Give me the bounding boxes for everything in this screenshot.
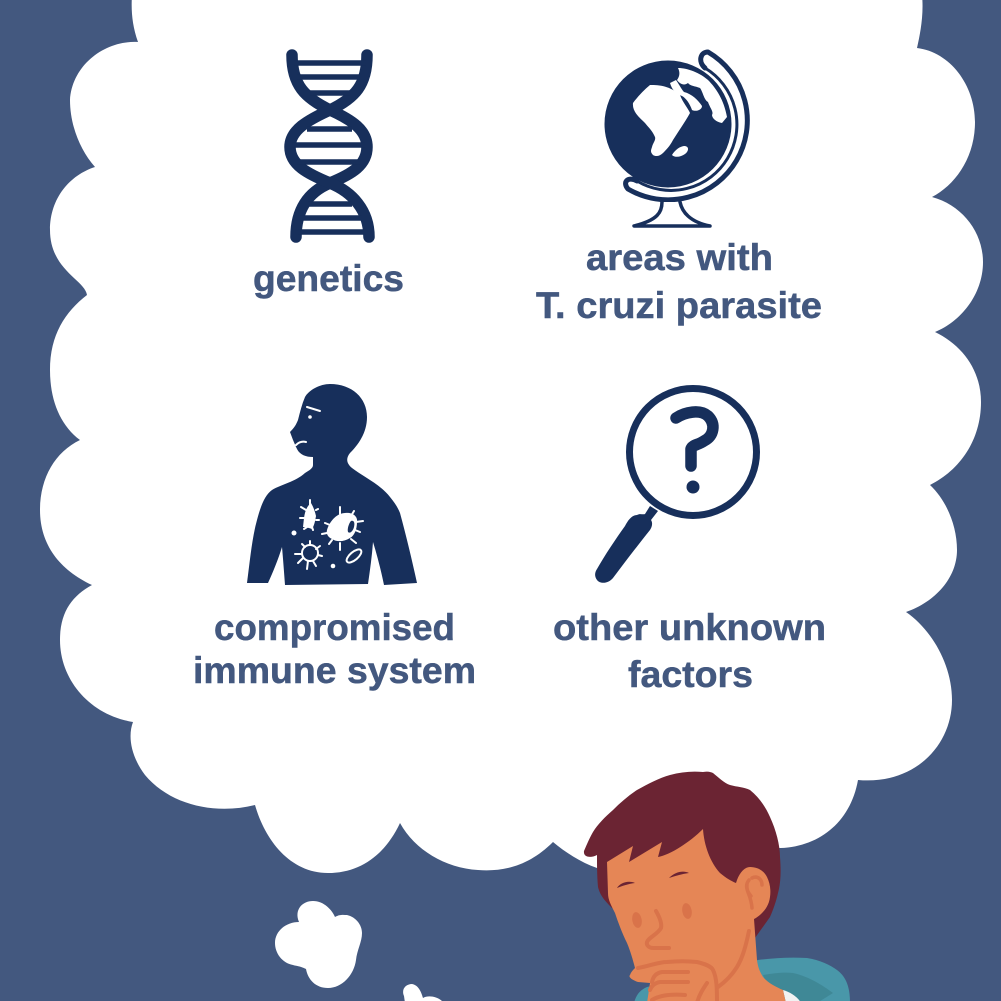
white collar bbox=[783, 990, 801, 1001]
eyebrows and eyes bbox=[617, 872, 689, 888]
label: compromised immune system: compromised bbox=[214, 607, 455, 648]
ear detail bbox=[747, 877, 762, 908]
hair bbox=[584, 772, 781, 938]
label: other unknown factors: factors bbox=[628, 654, 753, 695]
icon: magnifying glass with question mark bbox=[595, 388, 756, 583]
cheek marks bbox=[631, 902, 693, 929]
label: compromised immune system: immune system bbox=[193, 650, 476, 691]
label: compromised immune system bbox=[193, 607, 476, 691]
smallest thought bubble bbox=[403, 984, 444, 1001]
person thinking bbox=[584, 772, 850, 1001]
nose, jaw and hand lines bbox=[638, 911, 749, 1001]
label: other unknown factors bbox=[553, 607, 826, 695]
label: areas with T. cruzi parasite: areas with bbox=[586, 237, 773, 278]
icon: person with pathogens bbox=[247, 384, 417, 585]
icon: DNA helix bbox=[290, 55, 369, 237]
label: other unknown factors: other unknown bbox=[553, 607, 826, 648]
label: genetics: genetics bbox=[253, 258, 404, 299]
small thought bubble bbox=[275, 901, 362, 988]
label: areas with T. cruzi parasite bbox=[536, 237, 822, 326]
label: areas with T. cruzi parasite: T. cruzi parasite bbox=[536, 285, 822, 326]
icon: globe bbox=[604, 52, 747, 226]
hood bbox=[634, 958, 850, 1001]
face bbox=[607, 829, 786, 1001]
